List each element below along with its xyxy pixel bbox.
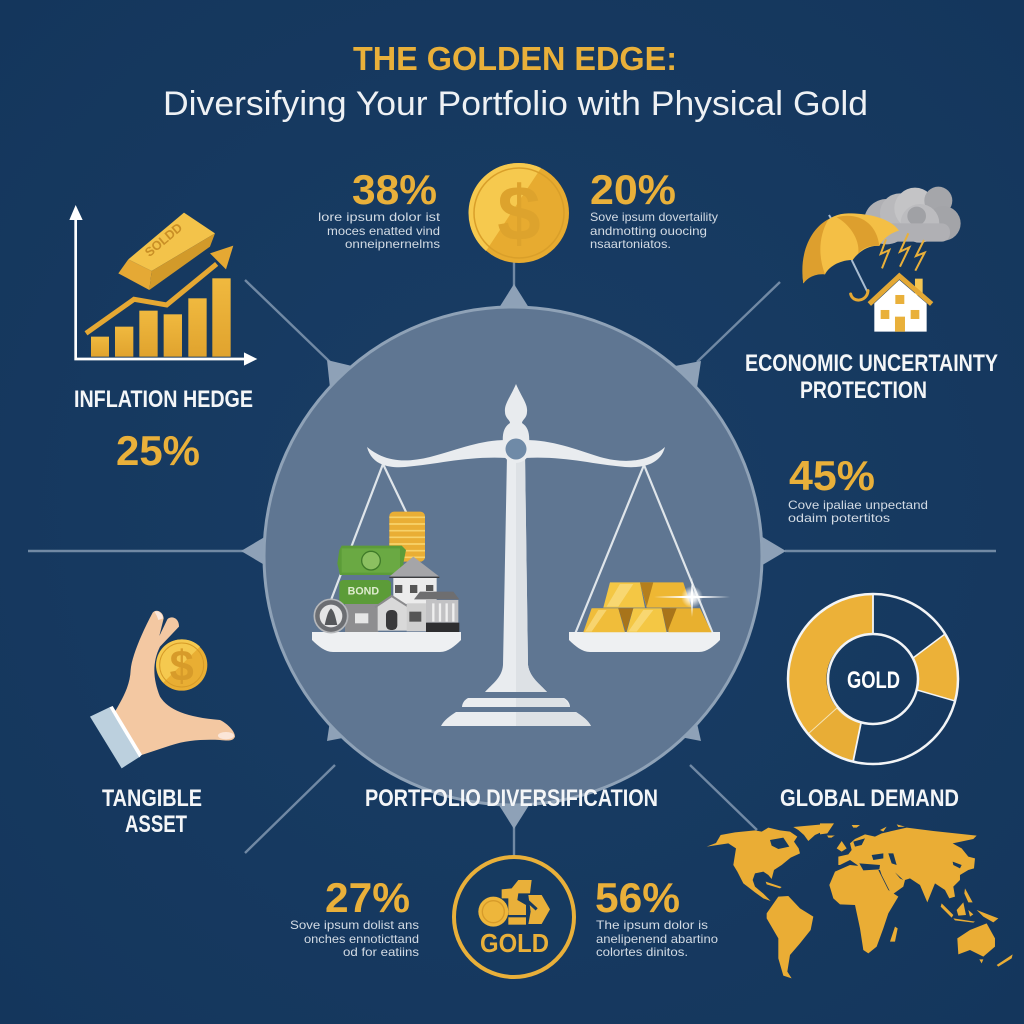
scale base: [462, 698, 570, 707]
central circle: [264, 307, 762, 805]
bond note: BOND: [348, 585, 379, 597]
icon: dollar coin: [468, 163, 569, 263]
label: global demand: GLOBAL DEMAND: [780, 785, 959, 812]
label: economic uncertainty protection: PROTECTION: [800, 377, 927, 404]
stat: 27%: od for eatiins: [343, 945, 419, 959]
eurasia africa oceania: [820, 823, 1013, 967]
donut right gold segment: [913, 634, 958, 701]
scale beam: [367, 440, 665, 467]
label: economic uncertainty protection: [745, 350, 998, 404]
stat: 20%: andmotting ouocing: [590, 224, 707, 238]
title: Diversifying Your Portfolio with Physical Gold: [163, 85, 868, 123]
connector lines: [28, 262, 996, 858]
icon: hand holding coin: $: [170, 643, 194, 691]
silver coin: [314, 599, 348, 633]
donut label: GOLD: [847, 667, 900, 694]
donut chart: [788, 594, 958, 764]
title: THE GOLDEN EDGE:: [353, 40, 677, 77]
left pan assets: [314, 512, 459, 633]
stat: 38%: moces enatted vind: [327, 224, 440, 238]
buildings: [345, 557, 459, 632]
stat: 56%: The ipsum dolor is: [596, 918, 708, 932]
bond note: [339, 580, 391, 604]
stat: 27%: onches ennoticttand: [304, 932, 419, 946]
green banknote: [337, 546, 406, 575]
stat: 56%: [595, 874, 718, 959]
icon: hand holding coin: [90, 611, 235, 768]
icon: dollar coin: $: [497, 169, 541, 257]
sparkle: [654, 577, 730, 617]
coin stack: [389, 512, 425, 562]
stat: 20%: [590, 166, 718, 251]
americas: [707, 823, 834, 978]
label: tangible asset: [102, 785, 202, 838]
stat: 45%: [788, 452, 928, 525]
icon: umbrella storm and house: [802, 187, 961, 332]
scale chains: [331, 464, 713, 634]
scale pivot: [502, 435, 530, 463]
stat: 56%: 56%: [595, 874, 680, 921]
right pan: [569, 632, 720, 652]
stat: 45%: 45%: [789, 452, 875, 499]
donut large gold segment: [788, 594, 873, 734]
scale column and finial: [503, 384, 529, 445]
label: tangible asset: ASSET: [125, 811, 187, 838]
icon: gold badge: [454, 857, 574, 977]
label: portfolio diversification: PORTFOLIO DIVERSIFICATION: [365, 785, 658, 812]
stat: 45%: Cove ipaliae unpectand: [788, 498, 928, 512]
label: inflation hedge: INFLATION HEDGE: [74, 386, 253, 413]
stat: 25%: 25%: [116, 427, 200, 474]
scale illustration: [312, 384, 730, 726]
stat: 38%: [318, 166, 441, 251]
title: [163, 40, 868, 123]
stat: 27%: 27%: [325, 874, 410, 921]
world map: [707, 823, 1013, 978]
stat: 20%: Sove ipsum dovertaility: [590, 210, 718, 224]
stat: 38%: onneipnernelms: [345, 237, 440, 251]
stat: 45%: odaim potertitos: [788, 511, 890, 525]
stat: 27%: Sove ipsum dolist ans: [290, 918, 419, 932]
stat: 56%: anelipenend abartino: [596, 932, 718, 946]
stat: 38%: Ɩore ipsum dolor ist: [318, 210, 441, 224]
stat: 20%: nsaartoniatos.: [590, 237, 671, 251]
donut divider: [853, 594, 873, 762]
connector triangles: [241, 284, 786, 829]
stat: 27%: [290, 874, 419, 959]
donut rings: [788, 594, 958, 764]
gold bars: [583, 582, 712, 632]
stat: 56%: colortes dinitos.: [596, 945, 688, 959]
left pan: [312, 632, 461, 652]
icon: inflation chart with gold bar: SOLDD: [142, 220, 185, 260]
icon: inflation chart with gold bar: [69, 205, 257, 366]
stat: 20%: 20%: [590, 166, 676, 213]
icon: gold badge: GOLD: [480, 928, 549, 958]
donut lower gold segment: [808, 708, 861, 762]
stat: 38%: 38%: [352, 166, 437, 213]
label: tangible asset: TANGIBLE: [102, 785, 202, 812]
